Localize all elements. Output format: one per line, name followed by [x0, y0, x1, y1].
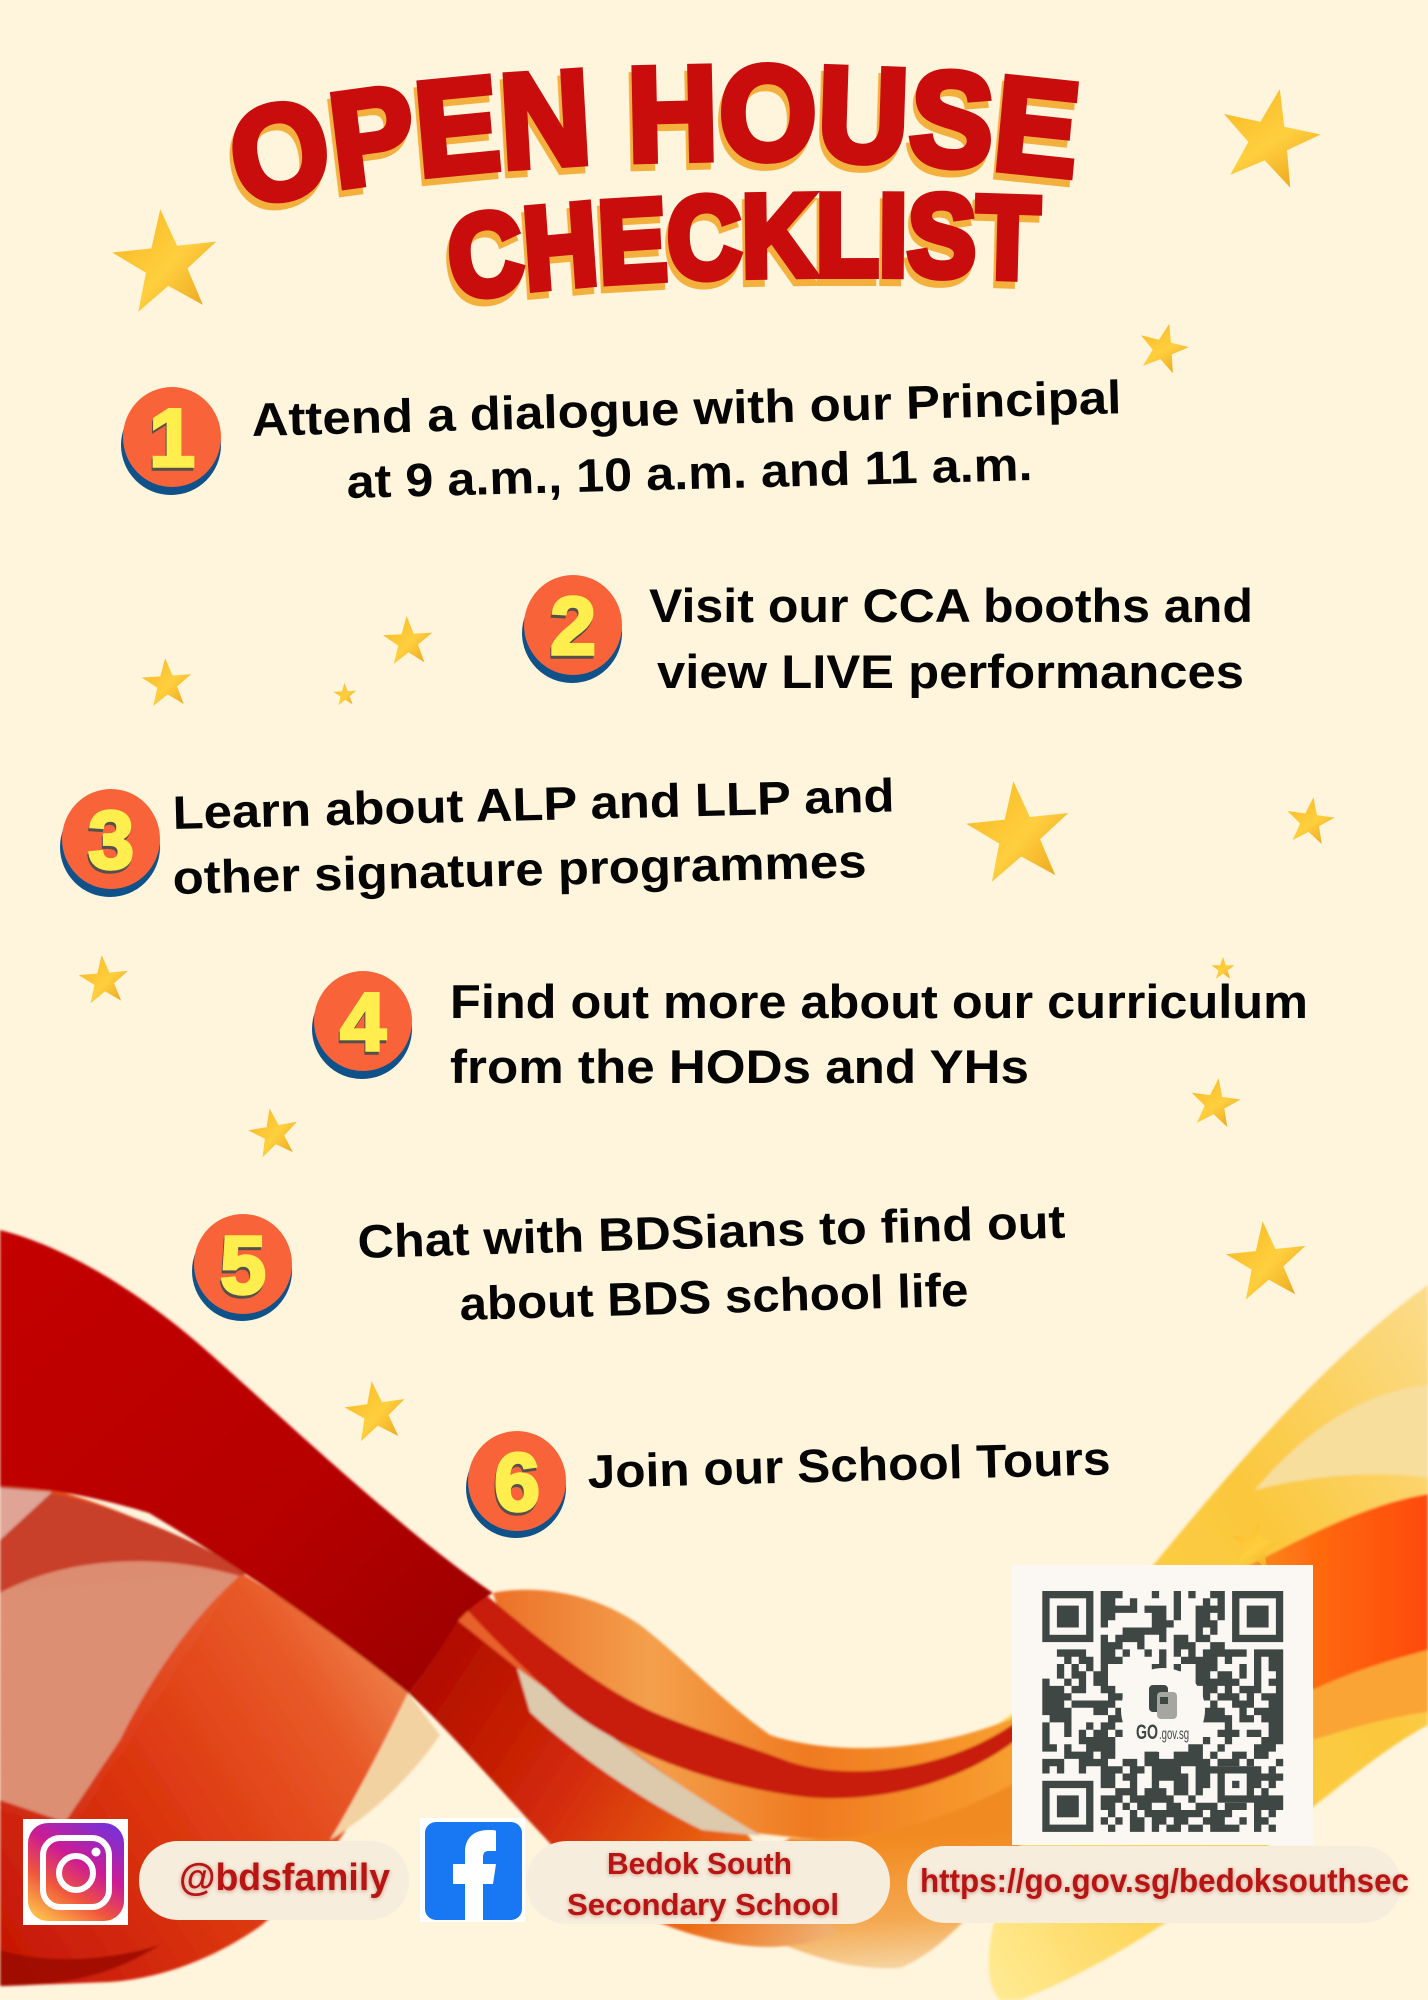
ribbon: pale mesh panel: [0, 1561, 239, 1822]
GO.gov.sg logo: .gov.sg: [1159, 1726, 1189, 1743]
ribbon: upper orange lobe: [493, 1590, 1020, 1839]
badge 3: [60, 789, 160, 897]
ribbon: right orange band: [1240, 1494, 1428, 1690]
pill: url: [907, 1846, 1409, 1923]
text 5 line 2: about BDS school life: [459, 1263, 969, 1330]
title: Checklist: CHECKLIST: [446, 190, 1042, 306]
text 3 line 1: Learn about ALP and LLP and: [172, 768, 895, 839]
item 2: [522, 575, 1253, 698]
text 3 line 2: other signature programmes: [172, 834, 867, 904]
ribbon: left bottom dark shade: [0, 1945, 160, 1986]
ribbon: pale fan: [330, 1693, 440, 1840]
decorative stars upper: [77, 79, 1337, 1571]
ribbon: dark red main band: [0, 1230, 493, 1693]
badge 1: 1: [149, 393, 195, 484]
item 6: [466, 1431, 1111, 1538]
badge 1: [121, 387, 221, 495]
badge 5: [192, 1214, 292, 1321]
url text: https://go.gov.sg/bedoksouthsec: [920, 1862, 1409, 1899]
item 4: [312, 971, 1308, 1093]
ribbon: pinch orange layer: [440, 1598, 565, 1718]
badge 4: 4: [340, 977, 386, 1068]
item 1: [121, 370, 1122, 508]
text 2 line 1: Visit our CCA booths and: [649, 579, 1253, 632]
badge 3: 3: [88, 795, 134, 886]
text 2 line 2: view LIVE performances: [657, 645, 1244, 698]
ribbon: yellow right sweep: [980, 1285, 1428, 2000]
ribbon: tan mesh wedge: [517, 1668, 762, 1836]
text 1 line 1: Attend a dialogue with our Principal: [251, 370, 1122, 446]
school line 2: Secondary School: [567, 1887, 839, 1922]
icon: Instagram: [23, 1819, 128, 1925]
ribbon: lower stripe fan: [700, 1780, 1020, 1968]
ribbon: inner red band: [462, 1590, 1016, 1798]
ribbon: pale yellow mesh on right: [1255, 1385, 1428, 1490]
text 4 line 2: from the HODs and YHs: [450, 1040, 1029, 1093]
ribbon: red mesh band: [0, 1486, 249, 1593]
text 6: Join our School Tours: [587, 1431, 1111, 1498]
school line 1: Bedok South: [607, 1846, 792, 1881]
background ribbon: [0, 1230, 1428, 2000]
text 4 line 1: Find out more about our curriculum: [450, 975, 1308, 1028]
item 3: [60, 768, 895, 904]
title: Open House: OPEN HOUSE: [229, 62, 1079, 210]
badge 2: [522, 575, 622, 683]
handle text: @bdsfamily: [179, 1857, 390, 1899]
GO.gov.sg logo: [1121, 1668, 1205, 1752]
text 5 line 1: Chat with BDSians to find out: [357, 1195, 1066, 1268]
badge 2: 2: [550, 581, 596, 672]
pill: school name: [526, 1841, 890, 1924]
text 1 line 2: at 9 a.m., 10 a.m. and 11 a.m.: [346, 437, 1033, 508]
icon: Facebook: [420, 1818, 525, 1922]
ribbon: lower red-orange fold: [408, 1620, 840, 1947]
badge 6: 6: [494, 1437, 540, 1528]
badge 4: [312, 971, 412, 1079]
pill: bdsfamily: [139, 1841, 409, 1920]
badge 6: [466, 1431, 566, 1538]
item 5: [192, 1195, 1066, 1330]
GO.gov.sg logo: GO: [1136, 1721, 1158, 1744]
ribbon: right lower orange band: [1313, 1650, 1428, 1740]
ribbon: base orange-red fold: [0, 1480, 408, 1986]
ribbon: pale mesh corner: [0, 1488, 52, 1540]
badge 5: 5: [220, 1220, 266, 1311]
QR modules: [1042, 1595, 1283, 1828]
QR code panel: [1012, 1565, 1313, 1845]
